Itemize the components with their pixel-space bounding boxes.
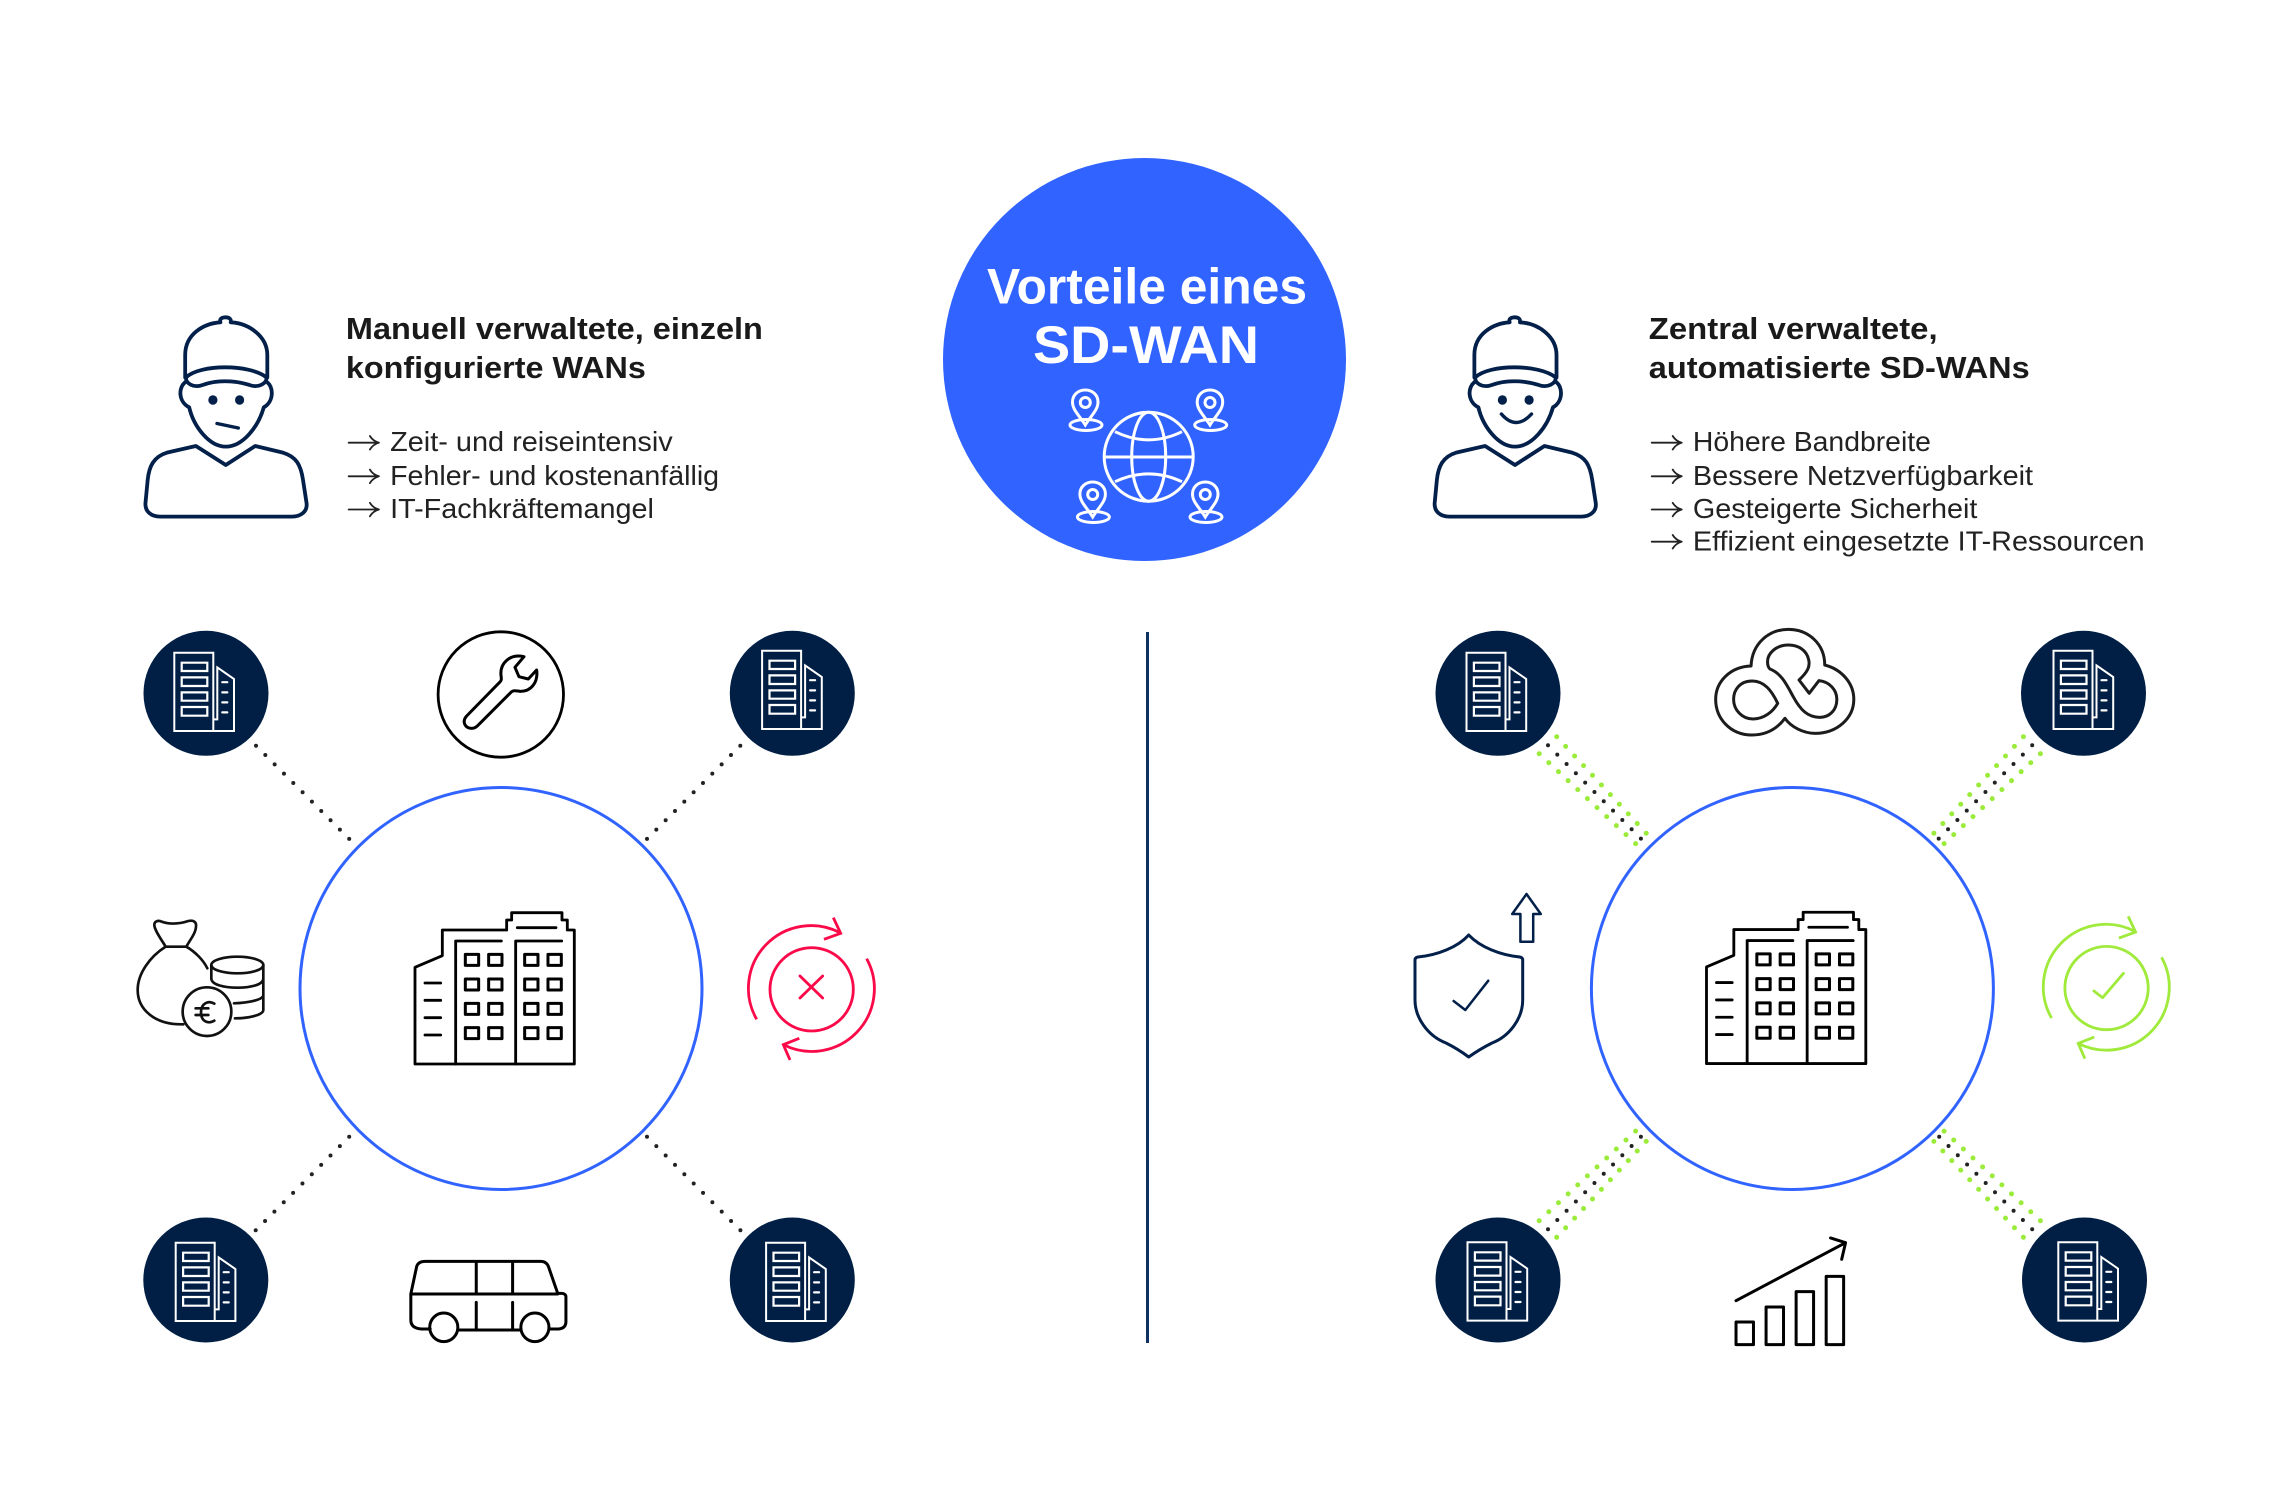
icon: left office building bbox=[415, 913, 574, 1064]
node: top right site bbox=[730, 631, 855, 756]
list: right benefits: Höhere Bandbreite bbox=[1693, 426, 1931, 457]
connector: green and dark dotted lines bottom right bbox=[1934, 1131, 2040, 1237]
heading: right bbox=[1649, 312, 2030, 385]
node: top right site bbox=[2021, 631, 2146, 756]
heading: right: Zentral verwaltete, bbox=[1649, 312, 1938, 346]
heading: left bbox=[346, 312, 763, 385]
list: left drawbacks: IT-Fachkräftemangel bbox=[390, 493, 654, 524]
node: top left site bbox=[144, 631, 268, 756]
node: bottom right site bbox=[730, 1218, 855, 1342]
icon: van bbox=[411, 1261, 566, 1342]
list: right benefits: Bessere Netzverfügbarkeit bbox=[1693, 460, 2033, 491]
central circle: right bbox=[1591, 788, 1993, 1190]
connector: green and dark dotted lines bottom left bbox=[1539, 1131, 1646, 1237]
node: top left site bbox=[1436, 631, 1560, 756]
connector: dotted lines left bbox=[256, 746, 740, 1230]
panel: right person with smiling face bbox=[1435, 317, 1596, 517]
icon: shield with check and up arrow bbox=[1415, 894, 1541, 1057]
heading: left: Manuell verwaltete, einzeln bbox=[346, 312, 763, 346]
list: right benefits bbox=[1652, 426, 2145, 556]
icon: rising bar chart bbox=[1736, 1238, 1846, 1345]
title: Vorteile eines bbox=[987, 258, 1307, 314]
list: left drawbacks: Fehler- und kostenanfällig bbox=[390, 460, 719, 491]
connector: green and dark dotted lines top right bbox=[1934, 737, 2040, 844]
central circle: Vorteile eines SD-WAN bbox=[943, 158, 1346, 561]
list: right benefits: Gesteigerte Sicherheit bbox=[1693, 493, 1978, 524]
panel: left diagram bbox=[138, 631, 874, 1342]
icon: wrench bbox=[438, 632, 564, 757]
list: left drawbacks bbox=[349, 426, 719, 524]
icon: green refresh with check bbox=[2043, 916, 2169, 1059]
divider bbox=[1146, 632, 1149, 1343]
icon: cloud bbox=[1716, 629, 1854, 735]
panel: right diagram bbox=[1415, 629, 2169, 1345]
title bbox=[987, 258, 1307, 375]
panel: left person with sad face bbox=[145, 317, 307, 517]
node: bottom right site bbox=[2022, 1218, 2147, 1342]
node: bottom left site bbox=[143, 1218, 268, 1342]
icon: money bag with euro coin bbox=[138, 921, 263, 1036]
icon: globe with location pins bbox=[1070, 390, 1227, 522]
icon: right office building bbox=[1706, 912, 1866, 1064]
heading: left: konfigurierte WANs bbox=[346, 351, 646, 385]
title: SD-WAN bbox=[1033, 316, 1259, 375]
heading: right: automatisierte SD-WANs bbox=[1649, 351, 2030, 385]
list: right benefits: Effizient eingesetzte IT-Ressourcen bbox=[1693, 526, 2145, 556]
central circle: left bbox=[300, 788, 702, 1190]
icon: red refresh with cross bbox=[748, 918, 874, 1060]
connector: green and dark dotted lines top left bbox=[1539, 737, 1646, 844]
node: bottom left site bbox=[1436, 1218, 1560, 1342]
list: left drawbacks: Zeit- und reiseintensiv bbox=[390, 426, 673, 457]
